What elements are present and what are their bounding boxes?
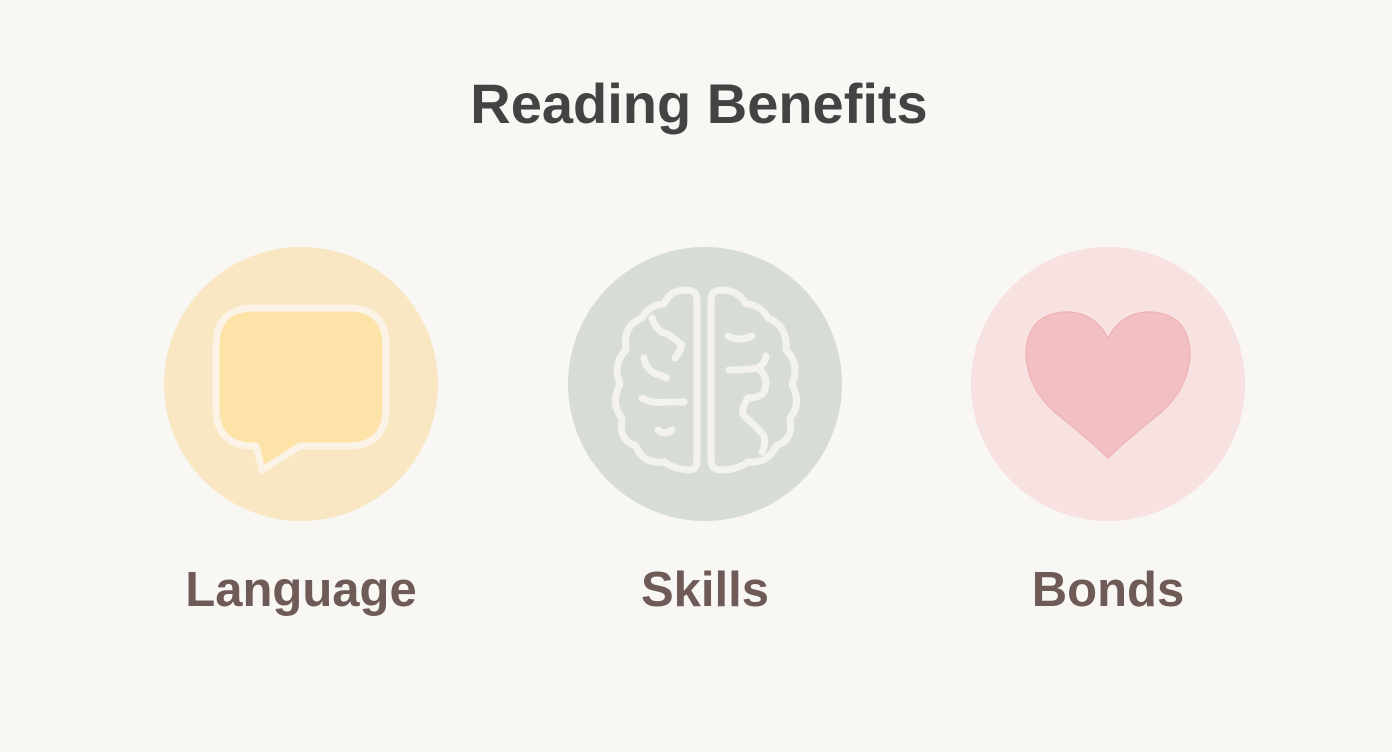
label: skills: Skills [641, 563, 769, 617]
label: bonds: Bonds [1032, 563, 1184, 617]
title: Reading Benefits [470, 72, 928, 135]
icon: bonds heart [971, 247, 1245, 521]
label: language: Language [185, 563, 417, 617]
icon: skills brain [568, 247, 842, 521]
icon: language speech bubble [164, 247, 438, 521]
